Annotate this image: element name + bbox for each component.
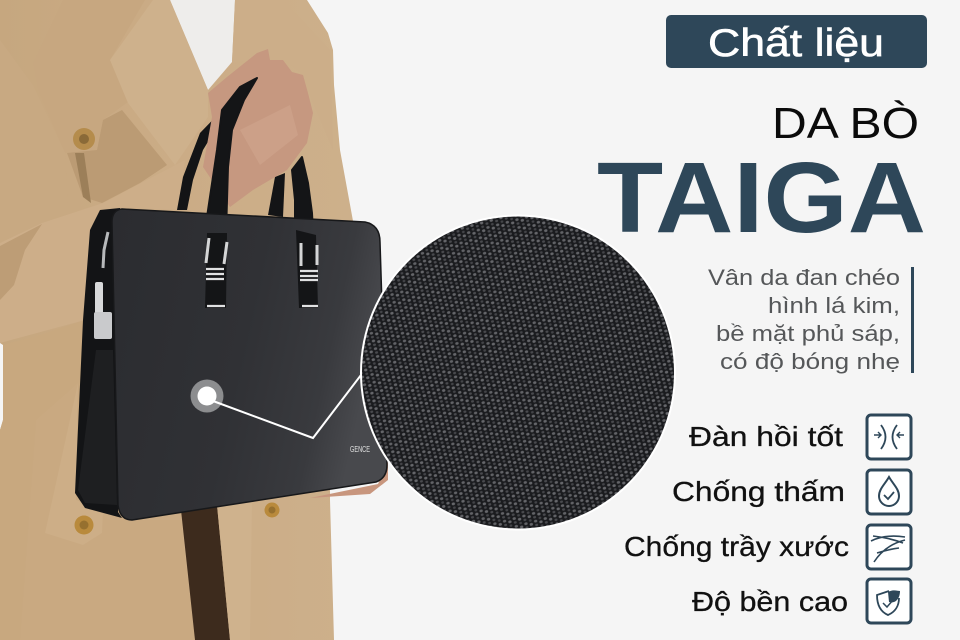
description text: [708, 265, 900, 374]
feature: Đàn hồi tốt: Đàn hồi tốt: [689, 421, 843, 452]
feature: Chống trầy xước: Chống trầy xước: [624, 531, 849, 562]
heading badge: Chất liệu: Chất liệu: [708, 22, 884, 65]
icon: scratches: [867, 525, 911, 569]
description accent bar: [911, 267, 914, 373]
icon: water drop: [867, 470, 911, 514]
description text: bề mặt phủ sáp,: [716, 321, 900, 346]
icon: shield: [867, 579, 911, 623]
description text: hình lá kim,: [768, 293, 900, 318]
leather texture magnifier circle: [360, 214, 676, 530]
lower coat panel: [0, 320, 85, 640]
callout pointer from bag to magnifier: [190, 375, 361, 438]
feature: Chống thấm: [672, 470, 911, 514]
lapel: [110, 0, 208, 165]
pocket flap: [45, 383, 103, 545]
feature: Đàn hồi tốt: [689, 415, 911, 459]
photo: model in beige trench coat holding bag: [0, 0, 388, 640]
feature: Độ bền cao: Độ bền cao: [692, 586, 848, 617]
description text: có độ bóng nhẹ: [720, 349, 900, 374]
feature: Độ bền cao: [692, 579, 911, 623]
sleeve: [0, 160, 185, 343]
handle straps and metal buckles: [205, 230, 318, 308]
heading badge: Chất liệu: [666, 15, 927, 68]
shadow under flap: [67, 110, 167, 203]
centre opening shadow: [181, 505, 230, 640]
bag side gusset: [75, 208, 122, 518]
description text: Vân da đan chéo: [708, 265, 900, 290]
left chest panel: [0, 40, 68, 243]
title: TAIGA: TAIGA: [597, 142, 926, 254]
title: DA BÒ: DA BÒ: [772, 99, 919, 148]
hand: [203, 49, 388, 498]
right coat shoulder: [232, 0, 333, 150]
brand logo: GENCE: [350, 445, 370, 454]
beige coat: [0, 0, 353, 640]
front handles: [207, 78, 313, 233]
zipper puller: [94, 232, 112, 339]
bag body: [75, 208, 387, 520]
back handle parts: [177, 102, 285, 217]
coat collar and flap: [33, 0, 145, 153]
bag front face: [112, 209, 387, 520]
white shirt: [168, 0, 238, 95]
feature: Chống trầy xước: [624, 525, 911, 569]
feature: Chống thấm: Chống thấm: [672, 476, 845, 507]
icon: elasticity: [867, 415, 911, 459]
coat buttons: [73, 128, 280, 534]
